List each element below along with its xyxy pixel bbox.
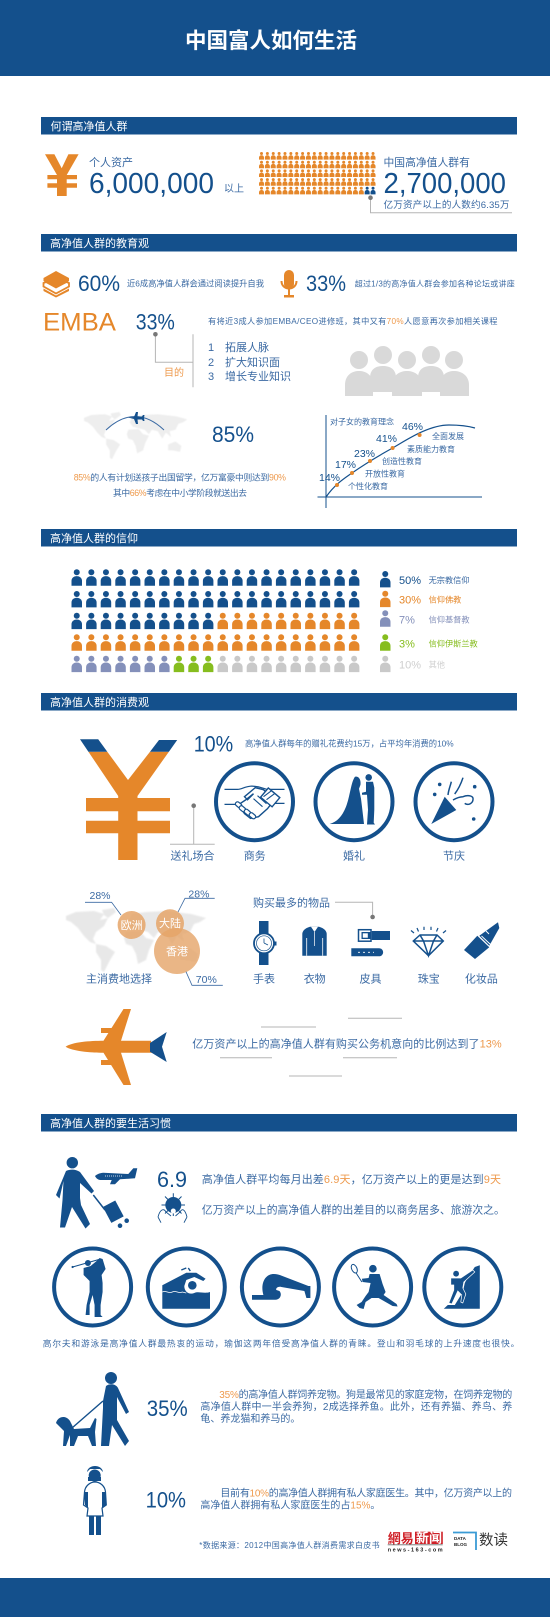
section heading: lifestyle — [41, 1114, 517, 1132]
purpose list: 拓展人脉 — [225, 340, 269, 354]
icon: badminton — [334, 1248, 411, 1326]
icon: sea urchin in hands — [158, 1193, 187, 1223]
doctors paragraph — [200, 1487, 512, 1511]
item labels: 衣物 — [304, 972, 326, 986]
purpose list: 扩大知识面 — [225, 355, 280, 369]
occasion labels: 节庆 — [443, 849, 465, 863]
chart: education philosophy curve: 个性化教育 — [348, 481, 388, 491]
jet text: 亿万资产以上的高净值人群有购买公务机意向的比例达到了13% — [192, 1036, 502, 1050]
logo: data blog: DATA — [454, 1536, 467, 1541]
study abroad text: 其中66%考虑在中小学阶段就送出去 — [113, 487, 247, 498]
icon: nurse — [84, 1466, 106, 1535]
connector: gift occasions — [170, 803, 215, 863]
legend: 信仰佛教 — [429, 594, 461, 604]
legend: 无宗教信仰 — [429, 575, 470, 585]
stat: 85%: 85% — [212, 422, 254, 447]
section heading: definition — [41, 117, 517, 134]
section heading: consumption — [41, 693, 517, 710]
callout: 63,500: 亿万资产以上的人数约6.35万 — [384, 199, 510, 211]
occasion labels: 商务 — [244, 849, 266, 863]
chart: education philosophy curve: 创造性教育 — [382, 456, 422, 466]
chart: education philosophy curve: 23% — [354, 448, 375, 460]
icon: belt — [351, 930, 390, 956]
chart: education philosophy curve: 开放性教育 — [365, 469, 405, 479]
panel: education — [43, 270, 515, 508]
icon: business handshake — [216, 763, 293, 840]
panel: sports icons — [43, 1248, 519, 1348]
purpose list — [208, 340, 291, 383]
people grid: orange — [259, 152, 376, 194]
icon: large yen — [80, 739, 177, 860]
number: 2,700,000: 2,700,000 — [384, 168, 506, 200]
purpose list: 2 — [208, 357, 214, 369]
chart: education philosophy curve: 17% — [335, 459, 356, 471]
study abroad text — [74, 472, 286, 498]
occasion labels: 婚礼 — [343, 849, 365, 863]
study abroad text: 85%的人有计划送孩子出国留学，亿万富豪中则达到90% — [74, 472, 286, 482]
panel: travel — [56, 1157, 505, 1228]
study abroad map — [84, 412, 187, 459]
item labels: 皮具 — [360, 973, 382, 986]
legend: 其他 — [429, 660, 445, 670]
panel: pets — [56, 1372, 512, 1446]
connector — [153, 332, 193, 387]
legend: 50% — [399, 575, 421, 587]
purpose list: 增长专业知识 — [225, 369, 291, 383]
logo: NetEase news — [388, 1530, 443, 1554]
stat: 35%: 35% — [147, 1396, 188, 1421]
legend — [380, 571, 478, 672]
section heading: lifestyle: 高净值人群的要生活习惯 — [50, 1116, 171, 1130]
legend: 10% — [399, 660, 421, 672]
people grid — [72, 569, 359, 672]
icon: small plane — [95, 1168, 137, 1184]
legend: 7% — [399, 614, 415, 626]
icon: yoga — [242, 1248, 319, 1326]
item labels: 化妆品 — [465, 972, 498, 986]
logo: NetEase news: 新闻 — [416, 1530, 442, 1546]
pets paragraph: 龟、养龙猫和养马的。 — [200, 1412, 300, 1425]
purpose label: 目的 — [164, 366, 184, 379]
top banner with title — [0, 0, 550, 76]
EMBA description: 有将近3成人参加EMBA/CEO进修班，其中又有70%人愿意再次参加相关课程 — [208, 316, 498, 326]
legend: 3% — [399, 638, 415, 650]
map label: 主消费地选择 — [86, 971, 152, 985]
icon: books — [44, 271, 69, 298]
stat: 33% EMBA: 33% — [136, 309, 175, 334]
item labels: 手表 — [253, 972, 275, 986]
sports text: 高尔夫和游泳是高净值人群最热衷的运动，瑜伽这两年倍受高净值人群的青睐。登山和羽毛球的上升速度也很快。 — [43, 1338, 519, 1348]
panel: faith pictogram — [72, 569, 478, 672]
section heading: consumption: 高净值人群的消费观 — [50, 695, 149, 709]
doctors paragraph: 高净值人群拥有私人家庭医生的占15%。 — [200, 1498, 380, 1511]
icon: microphone — [282, 270, 296, 298]
pets paragraph — [200, 1388, 512, 1425]
doctors paragraph: 目前有10%的高净值人群拥有私人家庭医生。其中，亿万资产以上的 — [220, 1487, 512, 1500]
heading with connector: 购买最多的物品 — [253, 895, 330, 909]
chart: education philosophy curve: 对子女的教育理念 — [330, 417, 394, 427]
data source: *数据来源：2012中国高净值人群消费需求白皮书 — [199, 1540, 380, 1550]
stat: 60%: 60% — [78, 271, 120, 296]
chart: education philosophy curve: 14% — [319, 472, 340, 484]
gift spending text: 高净值人群每年的赠礼花费约15万，占平均年消费的10% — [245, 739, 454, 749]
section heading: education: 高净值人群的教育观 — [50, 236, 149, 250]
legend: 信仰伊斯兰教 — [429, 638, 478, 648]
business trip text: 高净值人群平均每月出差6.9天，亿万资产以上的更是达到9天 — [202, 1172, 501, 1186]
icon: lipstick — [464, 922, 499, 959]
logo: data blog: 数读 — [479, 1532, 508, 1549]
section heading: faith — [41, 529, 517, 546]
panel: consumption destination map — [66, 888, 223, 986]
panel: business jet — [66, 1009, 502, 1085]
icon: watch — [254, 921, 276, 965]
section heading: faith: 高净值人群的信仰 — [50, 531, 138, 545]
forums text: 超过1/3的高净值人群会参加各种论坛或讲座 — [355, 278, 515, 288]
icon: swimming — [148, 1248, 225, 1326]
logo: NetEase news: 網易 — [388, 1531, 414, 1546]
panel: gifting — [80, 732, 492, 863]
icon: person walking dog — [56, 1372, 129, 1446]
pets paragraph: 35%的高净值人群饲养宠物。狗是最常见的家庭宠物，在饲养宠物的 — [219, 1388, 512, 1401]
China HNW label: 中国高净值人群有 — [384, 155, 470, 169]
logo: NetEase news: news-163-com — [388, 1548, 443, 1554]
stat: 6.9: 6.9 — [157, 1167, 187, 1192]
EMBA wordmark: EMBA — [43, 309, 116, 337]
purpose list: 3 — [208, 371, 214, 383]
top banner with title: 中国富人如何生活 — [185, 28, 357, 53]
section heading: education — [41, 234, 517, 252]
speed lines — [220, 1018, 402, 1076]
callouts — [85, 898, 223, 985]
icon: wedding couple — [316, 763, 392, 840]
trip purpose text: 亿万资产以上的高净值人群的出差目的以商务居多、旅游次之。 — [202, 1202, 505, 1216]
item labels — [253, 972, 498, 986]
stat: 10%: 10% — [194, 732, 233, 757]
above label: 以上 — [224, 183, 244, 195]
bubbles — [118, 909, 200, 974]
icon: yen sign — [45, 154, 79, 196]
chart: education philosophy curve: 素质能力教育 — [407, 444, 455, 454]
bubbles: 大陆 — [159, 916, 181, 930]
logo: data blog — [453, 1532, 508, 1550]
occasion labels — [244, 849, 465, 863]
panel: most purchased items — [253, 895, 499, 986]
world map — [66, 908, 206, 972]
item labels: 珠宝 — [418, 972, 440, 986]
icon: shirt — [302, 927, 327, 956]
icon: large plane — [66, 1009, 167, 1085]
heading with connector — [253, 895, 375, 919]
panel: consumption destination map: 28% — [90, 890, 111, 902]
icon: traveler with suitcase — [56, 1157, 129, 1228]
legend: 信仰基督教 — [429, 614, 470, 624]
panel: consumption destination map: 28% — [188, 888, 209, 900]
connector: gift occasions: 送礼场合 — [170, 849, 214, 863]
legend: 30% — [399, 594, 421, 606]
icon: climbing — [424, 1248, 501, 1326]
icon: party popper — [416, 763, 492, 840]
icon: diamond — [411, 927, 446, 956]
pets paragraph: 高净值人群中一半会养狗，2成选择养鱼。此外，还有养猫、养鸟、养 — [200, 1400, 512, 1413]
section heading: definition: 何谓高净值人群 — [50, 119, 128, 133]
panel: consumption destination map: 70% — [196, 974, 217, 986]
panel: family doctors — [84, 1466, 512, 1535]
stat: 33% forums: 33% — [306, 271, 346, 296]
chart: education philosophy curve — [318, 415, 482, 508]
bottom banner — [0, 1578, 550, 1617]
number: 6,000,000: 6,000,000 — [89, 168, 214, 200]
callout: 63,500 — [368, 195, 512, 213]
bubbles: 欧洲 — [121, 919, 143, 932]
chart: education philosophy curve: 全面发展 — [432, 431, 464, 441]
stat: 10%: 10% — [146, 1488, 186, 1513]
panel: definition of high net worth — [45, 152, 512, 213]
bubbles: 香港 — [166, 945, 188, 958]
personal assets text: 个人资产 — [89, 155, 133, 169]
icon: crowd — [345, 346, 469, 396]
purpose list: 1 — [208, 342, 214, 354]
reading text: 近6成高净值人群会通过阅读提升自我 — [127, 278, 264, 288]
icon: golf — [54, 1248, 131, 1326]
chart: education philosophy curve: 41% — [376, 433, 397, 445]
logo: data blog: BLOG — [454, 1542, 467, 1547]
chart: education philosophy curve: 46% — [402, 421, 423, 433]
